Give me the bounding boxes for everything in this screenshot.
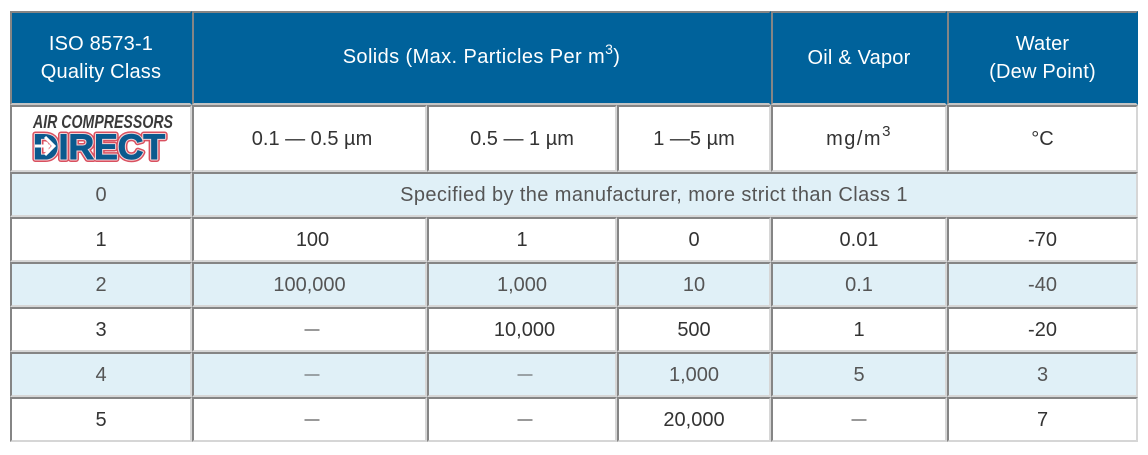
class 5 row — [10, 397, 192, 442]
data table: 100 — [296, 228, 329, 250]
header: solids — [192, 11, 771, 105]
class 2 row — [10, 262, 192, 307]
unit: mg/m3 — [771, 105, 947, 172]
unit: 0.5-1: 0.5 — 1 µm — [470, 128, 574, 150]
data table: 0 — [688, 228, 700, 250]
class 5 row: 5 — [95, 408, 107, 430]
data table: -40 — [1028, 274, 1057, 296]
icon: Air Compressors Direct logo — [32, 113, 173, 165]
data table: 5 — [853, 364, 865, 386]
data table: -70 — [1028, 228, 1057, 250]
data table: -20 — [1028, 318, 1057, 340]
header: water — [947, 11, 1138, 105]
header: ISO class: ISO 8573-1 — [49, 33, 153, 55]
data table: 10 — [683, 274, 705, 296]
header: oil and vapor — [771, 11, 947, 105]
class 3 row — [10, 307, 192, 352]
unit: degrees — [947, 105, 1138, 172]
data table: 1,000 — [669, 364, 719, 386]
data table: 20,000 — [663, 408, 725, 430]
data table: — — [304, 366, 320, 382]
data table: 1 — [853, 318, 865, 340]
unit: 1-5 — [617, 105, 771, 172]
header: ISO class — [10, 11, 192, 105]
header: water: (Dew Point) — [989, 61, 1096, 83]
class 0 row: 0 — [95, 184, 107, 206]
header: water: Water — [1016, 33, 1069, 55]
unit: 1-5: 1 —5 µm — [653, 128, 735, 150]
unit: mg/m3: mg/m3 — [826, 123, 892, 150]
class 3 row: 3 — [95, 318, 107, 340]
unit: 0.1-0.5 — [192, 105, 427, 172]
unit: degrees: °C — [1031, 128, 1054, 150]
data table: 500 — [677, 318, 711, 340]
class 2 row: 2 — [95, 274, 107, 296]
class 1 row — [10, 217, 192, 262]
data table: — — [852, 410, 866, 428]
data table: — — [518, 410, 532, 428]
data table: 3 — [1037, 364, 1048, 386]
data table: 10,000 — [494, 318, 555, 340]
data table: 1,000 — [497, 274, 547, 296]
data table: — — [304, 410, 320, 428]
header: oil and vapor: Oil & Vapor — [808, 47, 910, 69]
data table: — — [304, 320, 320, 338]
class 0 note: Specified by the manufacturer, more strict than Class 1 — [400, 184, 908, 206]
class 1 row: 1 — [95, 228, 107, 250]
header: ISO class: Quality Class — [41, 61, 161, 83]
header: solids: Solids (Max. Particles Per m3) — [343, 41, 620, 68]
unit: 0.1-0.5: 0.1 — 0.5 µm — [252, 128, 372, 150]
unit: 0.5-1 — [427, 105, 617, 172]
logo cell — [10, 105, 192, 172]
data table: 1 — [516, 228, 528, 250]
data table: 0.01 — [840, 228, 878, 250]
data table: — — [518, 366, 532, 382]
class 4 row: 4 — [95, 364, 107, 386]
data table: 7 — [1037, 408, 1048, 430]
class 4 row — [10, 352, 192, 397]
data table: 0.1 — [845, 274, 873, 296]
data table: 100,000 — [273, 274, 346, 296]
class 0 row — [10, 172, 192, 217]
class 0 note — [192, 172, 1138, 217]
